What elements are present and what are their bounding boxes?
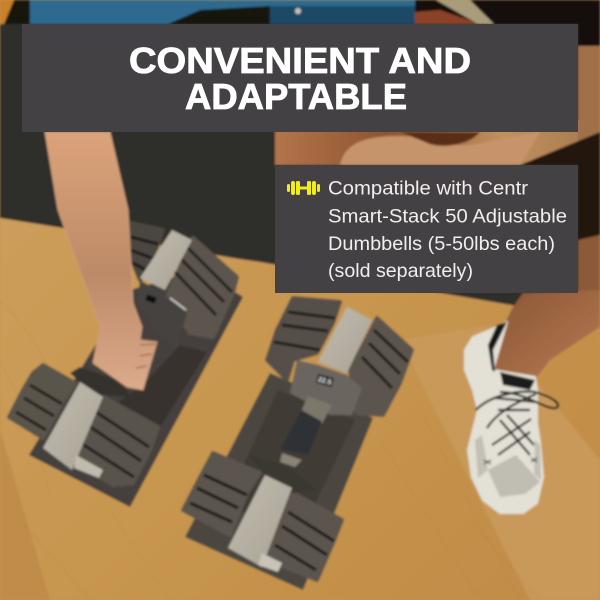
dumbbell: right, bottom head [183,453,342,580]
icon: dumbbell [287,181,320,195]
shoe [465,322,558,513]
feature text: Smart-Stack 50 Adjustable [328,206,567,228]
feature text: Compatible with Centr [328,178,529,200]
dumbbell: left, bottom head [9,365,158,485]
exercise mat [0,0,600,320]
title panel [22,24,578,132]
lower leg [493,290,600,377]
feature callout panel [275,165,578,293]
feature text [328,178,567,282]
feature text: (sold separately) [328,260,473,282]
shoe laces [476,392,558,455]
dumbbell: left, top head [130,223,237,347]
title: CONVENIENT AND [129,40,471,81]
title: ADAPTABLE [185,76,407,117]
upper leg and knee [275,24,600,300]
weight display [316,374,334,387]
tray: left dumbbell [29,270,243,507]
dumbbell: right, top head [267,298,412,415]
weight display: 22.5 [317,376,332,387]
title [129,40,471,117]
arm and hand [45,132,157,390]
dumbbell: right, handle [280,396,332,467]
tray: right dumbbell [185,373,373,590]
person top: shirt and background [0,0,600,24]
feature text: Dumbbells (5-50lbs each) [328,233,555,255]
